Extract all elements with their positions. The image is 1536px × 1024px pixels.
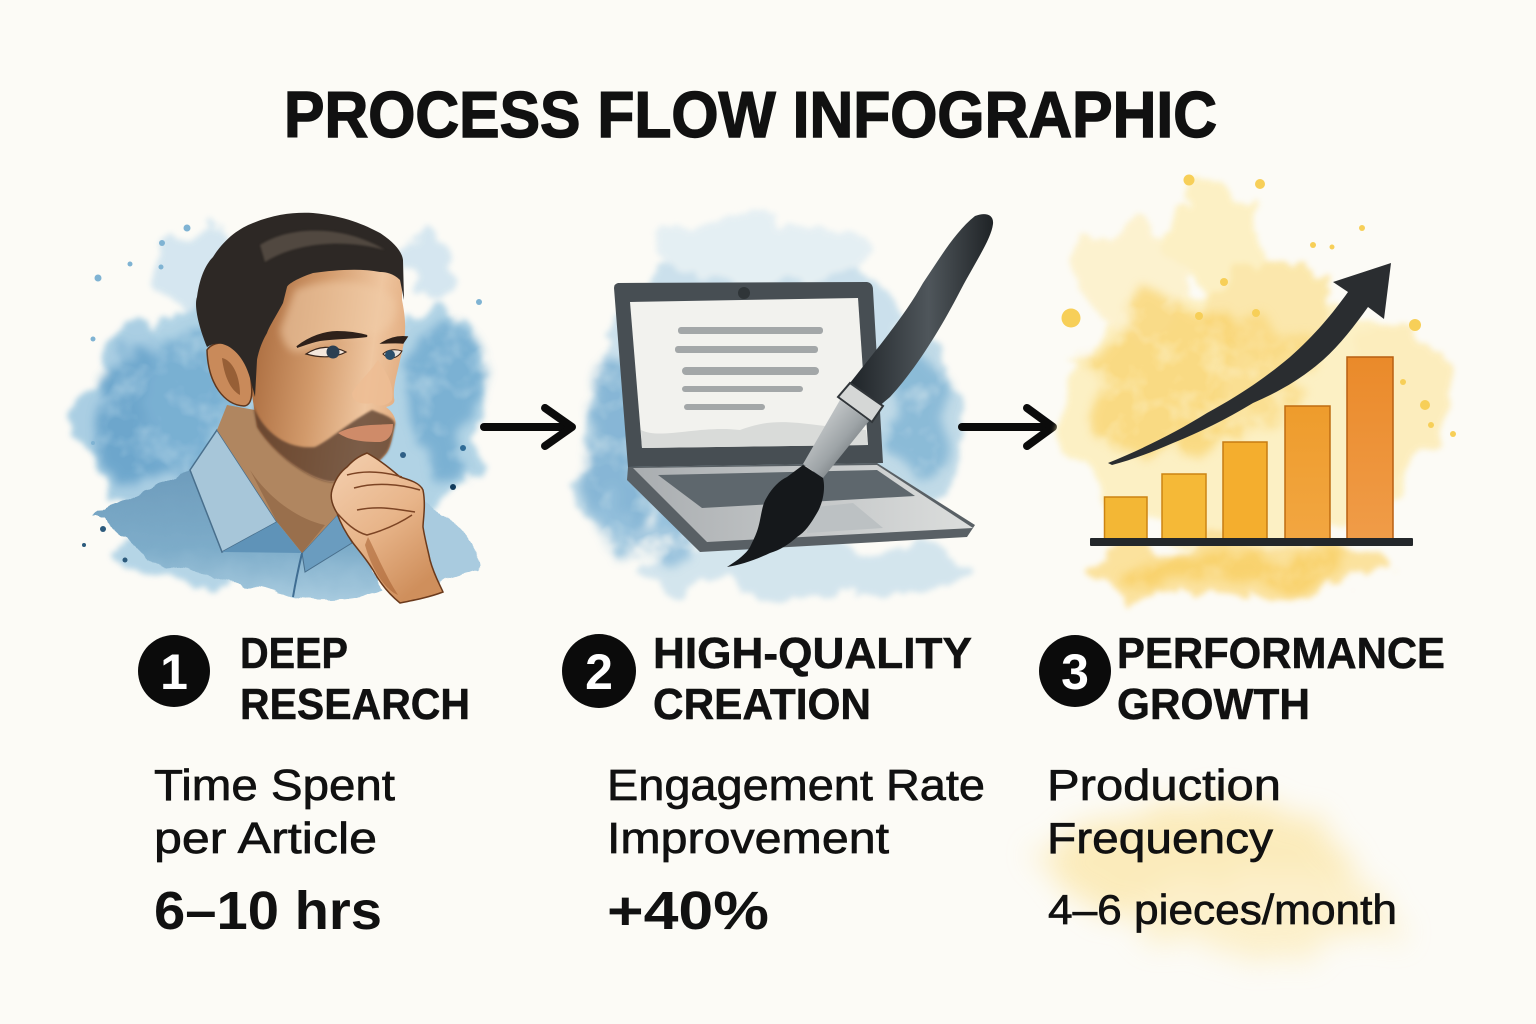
eyes and brows [297,332,407,360]
step 3 heading: GROWTH [1117,680,1310,729]
bars [1104,357,1393,539]
screen text lines [675,327,823,410]
illustration: laptop and paintbrush [582,214,993,596]
title: PROCESS FLOW INFOGRAPHIC [284,78,1217,151]
number badge 3: 3 [1061,644,1089,700]
step 3 metric: 4–6 pieces/month [1048,886,1397,933]
step 1 metric [154,761,395,941]
shirt: right shoulder [400,500,480,590]
step 2 heading [562,629,972,729]
cheek light [280,281,396,352]
illustration: thinking researcher [80,213,483,603]
growth arrow [1108,263,1391,465]
step 1 heading: DEEP [240,629,348,678]
number badge 1 [138,635,210,707]
ear [207,343,252,406]
step 3 heading [1039,629,1445,729]
nose [352,360,393,406]
shirt: body [92,430,385,600]
hair [196,213,404,397]
arrow: step 1 to 2 [484,408,572,446]
step 1 heading [138,629,470,729]
laptop screen [614,282,883,467]
step 1 metric: 6–10 hrs [154,881,382,941]
watercolor splash: yellow [1060,174,1456,598]
step 3 metric [1047,761,1397,933]
beard [253,405,395,482]
step 1 metric: Time Spent [154,761,395,810]
step 2 metric: Improvement [607,814,889,863]
step 2 metric: +40% [607,881,769,941]
paint splatter dots [82,224,482,562]
step 2 heading: CREATION [653,680,871,729]
lips [338,424,393,442]
paint splatter dots [1062,174,1456,437]
step 2 metric [607,761,985,941]
arrow: step 2 to 3 [962,408,1053,446]
number badge 3 [1039,635,1111,707]
watercolor splash: blue [582,215,975,596]
step 3 metric: Frequency [1047,814,1273,863]
step 3 heading: PERFORMANCE [1117,629,1445,678]
axis line [1090,538,1413,546]
illustration: growth bar chart [1060,174,1456,598]
number badge 2: 2 [585,644,613,700]
hand on chin [331,453,443,603]
step 2 heading: HIGH-QUALITY [653,629,972,678]
laptop base [627,463,975,552]
step 1 heading: RESEARCH [240,680,470,729]
hair highlights [260,231,385,262]
number badge 2 [562,634,636,708]
neck [217,405,340,553]
number badge 1: 1 [160,644,188,700]
paintbrush [727,214,993,567]
step 1 metric: per Article [154,814,377,863]
watercolor splash behind step 3 metric [1040,802,1395,957]
step 3 metric: Production [1047,761,1281,810]
step 2 metric: Engagement Rate [607,761,985,810]
face [252,256,405,482]
watercolor splash: blue [80,224,483,584]
